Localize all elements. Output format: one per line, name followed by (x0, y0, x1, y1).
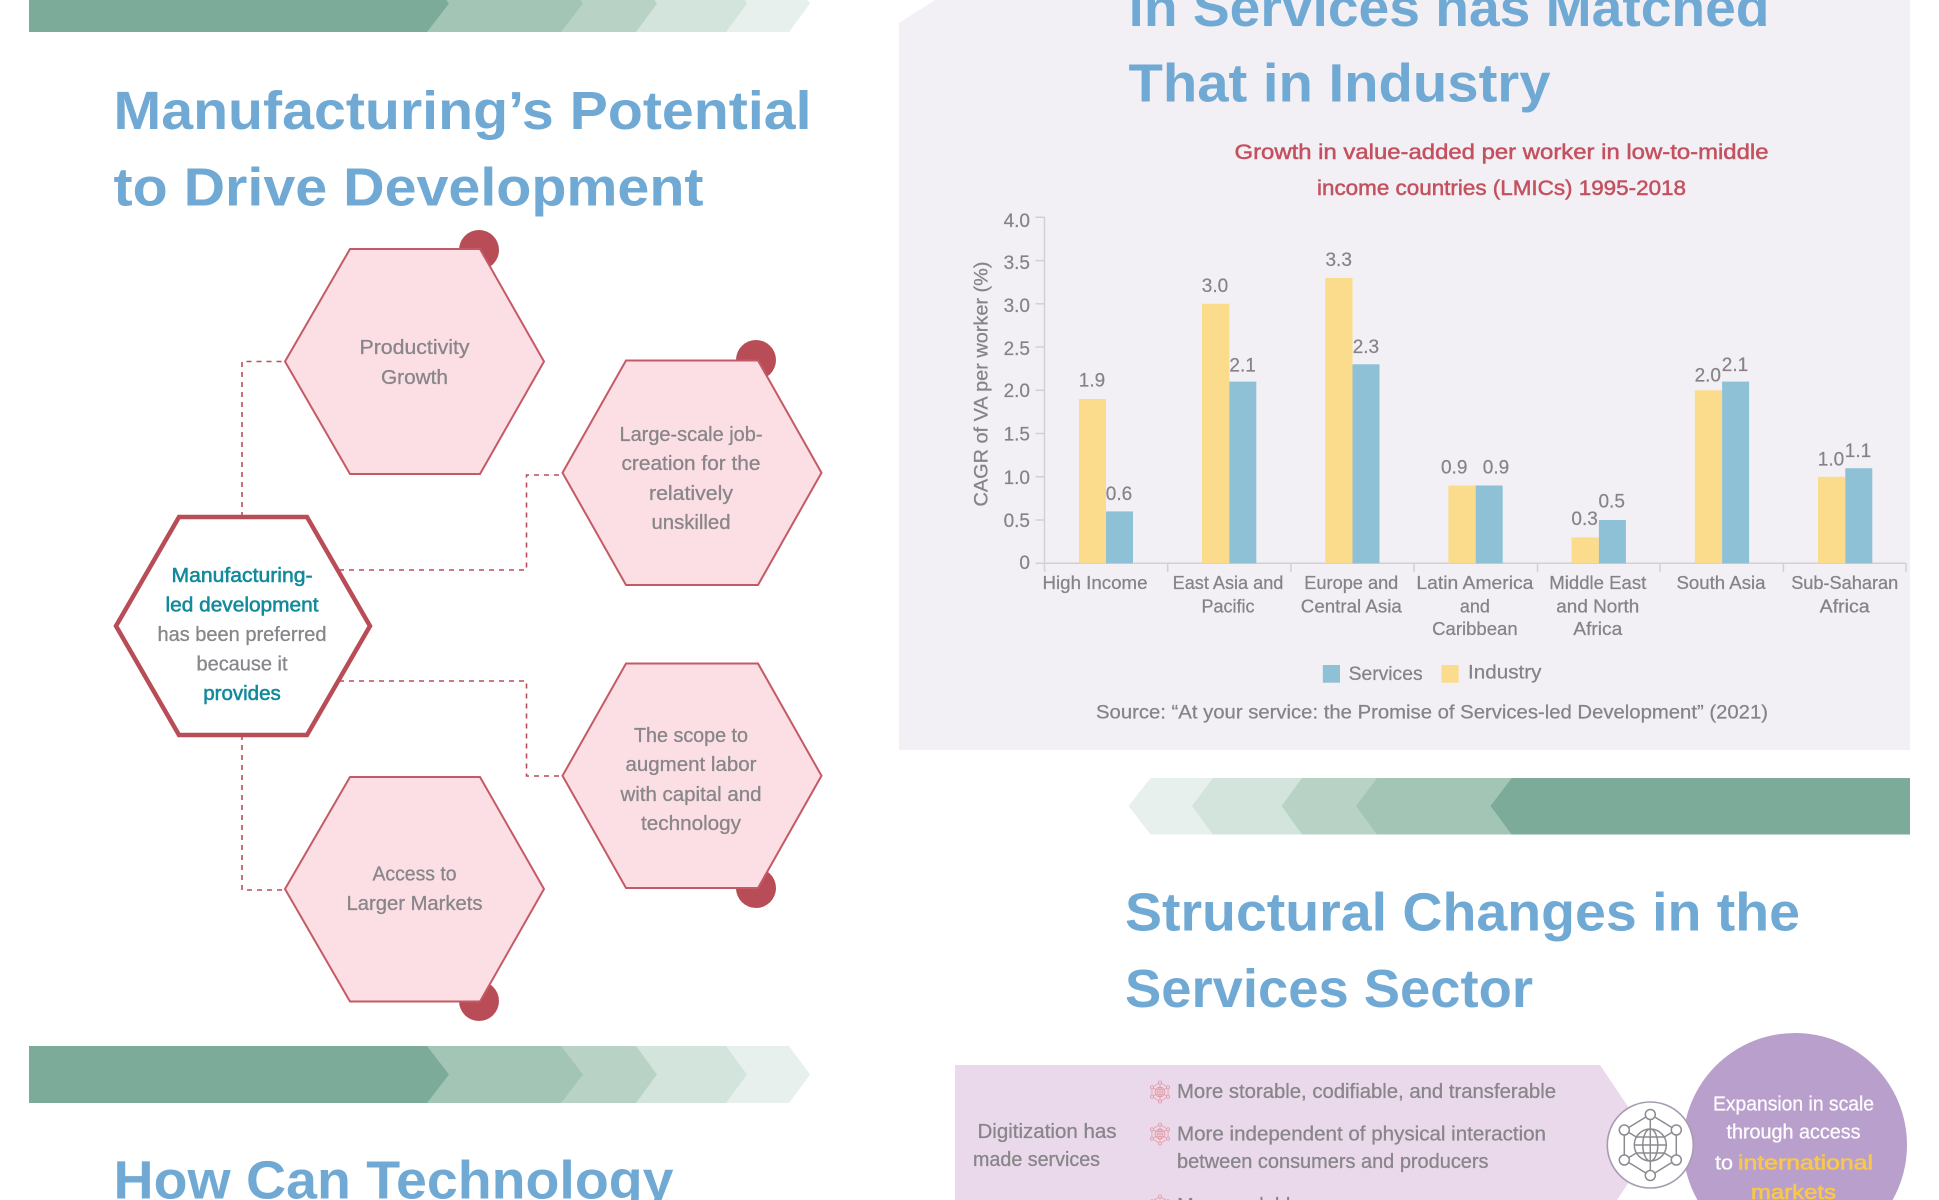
y-axis tick labels: 4.0 (1004, 211, 1030, 232)
hexagon: scope to augment labor: The scope to (634, 725, 748, 747)
category labels: Pacific (1202, 595, 1254, 616)
category labels: Sub-Saharan (1791, 572, 1898, 593)
data labels: 1.0 (1818, 450, 1844, 470)
legend (1323, 662, 1542, 685)
circle: expansion in scale: through access (1726, 1122, 1860, 1144)
hexagon: large-scale job creation: relatively (649, 483, 733, 505)
y-axis tick labels: 2.5 (1004, 339, 1030, 360)
y-axis tick labels: 0 (1019, 553, 1030, 574)
bullet: independent: More independent of physical interaction (1177, 1123, 1546, 1145)
panel: digitization arrow (955, 1065, 1654, 1200)
chart axes (1036, 217, 1906, 572)
circle: expansion in scale: international (1738, 1152, 1873, 1174)
data labels: 2.3 (1353, 337, 1379, 358)
hexagon: productivity growth: Productivity (360, 337, 470, 359)
hexagon: scope to augment labor: with capital and (619, 784, 762, 806)
hexagon: manufacturing-led development: led development (166, 594, 319, 616)
bullet: storable: More storable, codifiable, and transferable (1177, 1081, 1556, 1103)
hexagon: scope to augment labor: augment labor (626, 754, 757, 776)
data labels: 0.9 (1483, 458, 1509, 478)
hexagon: access to larger markets: Access to (372, 864, 456, 886)
hexagon: large-scale job creation (562, 340, 822, 585)
chart subtitle: income countries (LMICs) 1995-2018 (1317, 177, 1686, 200)
circle: expansion in scale: to (1715, 1152, 1733, 1174)
bar chart (972, 211, 1906, 639)
heading: structural changes (1125, 882, 1800, 1019)
middle chevron banner (29, 1046, 810, 1103)
bullet: independent (1150, 1123, 1546, 1173)
category labels: Africa (1573, 618, 1623, 639)
category labels: Latin America (1416, 572, 1534, 593)
source note: Source: “At your service: the Promise of Services-led Development” (2021) (1096, 701, 1768, 723)
hexagon: manufacturing-led development (116, 517, 370, 735)
top chevron banner (29, 0, 810, 32)
data labels: 3.0 (1202, 276, 1228, 297)
right chevron banner (1129, 778, 1910, 834)
data labels: 0.9 (1441, 458, 1467, 478)
hexagon: manufacturing-led development: Manufacturing- (172, 565, 312, 587)
hexagon: scope to augment labor (562, 664, 822, 908)
panel: services productivity chart (899, 0, 1910, 750)
heading: manufacturing's potential: to Drive Development (114, 158, 704, 218)
data labels (1079, 250, 1871, 530)
y-axis tick labels: 2.0 (1004, 381, 1030, 402)
hexagon: access to larger markets (285, 777, 544, 1021)
category labels: Europe and (1304, 572, 1398, 593)
y-axis tick labels: 3.0 (1004, 296, 1030, 317)
hexagon: manufacturing-led development: provides (203, 683, 281, 705)
category labels: and North (1556, 595, 1639, 616)
dashed connectors (242, 362, 562, 890)
data labels: 0.6 (1106, 484, 1132, 505)
data labels: 1.9 (1079, 371, 1105, 392)
hexagon: large-scale job creation: Large-scale job- (620, 424, 762, 446)
category labels: Caribbean (1432, 618, 1518, 639)
hexagon: scope to augment labor: technology (641, 813, 741, 835)
data labels: 3.3 (1325, 250, 1352, 271)
chart subtitle (1234, 141, 1768, 200)
heading: manufacturing's potential: Manufacturing’s Potential (114, 81, 812, 141)
data labels: 2.0 (1695, 366, 1721, 387)
heading: structural changes: Services Sector (1125, 959, 1533, 1019)
circle: expansion in scale: Expansion in scale (1713, 1094, 1874, 1116)
icon: globe network (1607, 1102, 1693, 1188)
hexagon: large-scale job creation: creation for the (622, 453, 760, 475)
circle: expansion in scale (1683, 1033, 1907, 1200)
data labels: 0.5 (1598, 491, 1625, 512)
category labels (1042, 572, 1898, 639)
heading: structural changes: Structural Changes in the (1125, 882, 1800, 942)
legend: Services (1349, 664, 1423, 685)
digitization label: made services (973, 1149, 1100, 1171)
data labels: 0.3 (1571, 509, 1598, 530)
y-axis tick labels: 1.0 (1004, 468, 1030, 489)
heading: manufacturing's potential (114, 81, 812, 218)
bullet: independent: between consumers and producers (1177, 1151, 1488, 1173)
hexagon: access to larger markets: Larger Markets (346, 893, 482, 915)
y-axis tick labels: 1.5 (1004, 424, 1030, 446)
hexagon: productivity growth (285, 230, 544, 474)
industry bars (1079, 278, 1845, 563)
category labels: East Asia and (1173, 572, 1283, 593)
y-axis tick labels: 0.5 (1004, 511, 1030, 532)
category labels: South Asia (1676, 572, 1766, 593)
data labels: 2.1 (1229, 356, 1256, 377)
hexagon: manufacturing-led development: has been preferred (158, 624, 326, 646)
hexagon: large-scale job creation: unskilled (652, 512, 730, 534)
digitization label: Digitization has (978, 1121, 1116, 1143)
chart subtitle: Growth in value-added per worker in low-to-middle (1234, 141, 1768, 164)
y-axis tick labels (1004, 211, 1030, 574)
heading: services matched industry (1128, 0, 1770, 114)
category labels: High Income (1042, 572, 1148, 593)
services bars (1106, 364, 1872, 563)
category labels: Middle East (1549, 572, 1646, 593)
digitization label (973, 1121, 1116, 1171)
category labels: Central Asia (1301, 595, 1403, 616)
heading: services matched industry: That in Industry (1128, 54, 1550, 114)
hexagon: productivity growth: Growth (381, 367, 448, 389)
data labels: 1.1 (1845, 441, 1871, 462)
hexagon: manufacturing-led development: because it (196, 654, 288, 676)
category labels: and (1460, 595, 1490, 616)
data labels: 2.1 (1722, 355, 1748, 376)
legend: Industry (1468, 662, 1542, 684)
category labels: Africa (1820, 595, 1870, 616)
y-axis tick labels: 3.5 (1004, 253, 1030, 274)
y-axis title: CAGR of VA per worker (%) (972, 262, 992, 506)
